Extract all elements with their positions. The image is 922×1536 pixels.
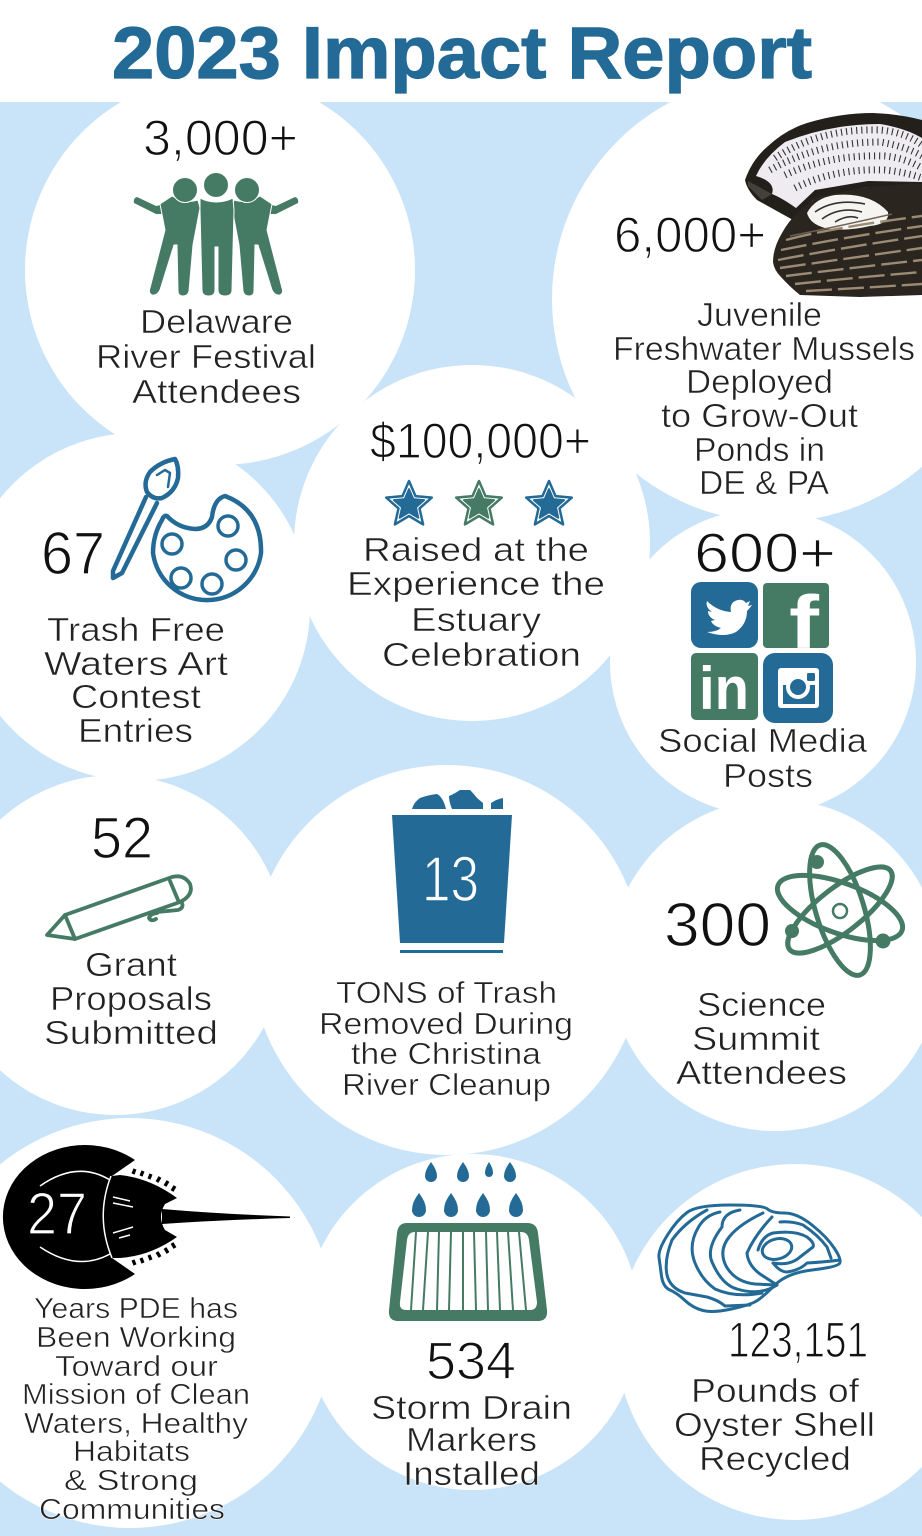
label: science summit attendees <box>676 986 847 1091</box>
label: pounds of oyster shell recycled: Oyster Shell <box>674 1406 875 1443</box>
number: 3,000+: 3,000+ <box>143 110 298 166</box>
icon: linkedin: in <box>699 655 749 722</box>
label: years PDE mission: Communities <box>39 1494 225 1526</box>
icon: oyster shell <box>659 1205 840 1311</box>
number: 300: 300 <box>664 891 771 960</box>
label: tons of trash removed: Removed During <box>319 1006 573 1041</box>
label: Delaware River Festival Attendees: River Festival <box>96 338 316 375</box>
label: grant proposals submitted <box>44 946 218 1051</box>
label: years PDE mission: Been Working <box>36 1322 236 1354</box>
label: pounds of oyster shell recycled: Recycled <box>699 1440 851 1477</box>
panel: social media <box>658 521 868 794</box>
label: Delaware River Festival Attendees: Delaware <box>140 303 293 340</box>
label: storm drain markers installed: Storm Drain <box>371 1389 572 1426</box>
label: social media posts <box>658 722 868 794</box>
label: juvenile mussels deployed: Freshwater Mussels <box>613 330 915 367</box>
label: trash free waters art contest entries: Entries <box>78 712 193 749</box>
panel: oyster shell <box>659 1205 875 1477</box>
label: years PDE mission: Habitats <box>73 1436 190 1468</box>
label: science summit attendees: Summit <box>692 1020 820 1057</box>
label: grant proposals submitted: Grant <box>85 946 177 983</box>
number: 67: 67 <box>41 520 105 587</box>
label: juvenile mussels deployed: Deployed <box>686 363 833 400</box>
label: years PDE mission: Years PDE has <box>34 1293 238 1325</box>
label: storm drain markers installed <box>371 1389 572 1492</box>
icon: brush and palette <box>113 459 261 600</box>
label: years PDE mission <box>22 1293 250 1526</box>
label: juvenile mussels deployed: Ponds in <box>694 431 825 468</box>
label: grant proposals submitted: Proposals <box>50 980 212 1017</box>
label: science summit attendees: Attendees <box>676 1054 847 1091</box>
label: storm drain markers installed: Markers <box>406 1421 537 1458</box>
label: years PDE mission: Waters, Healthy <box>24 1408 249 1440</box>
icon: mussel illustration <box>745 113 922 297</box>
label: raised at the celebration: Estuary <box>411 601 542 638</box>
panel: storm drain markers <box>371 1162 572 1492</box>
title: 2023 Impact Report <box>112 13 812 94</box>
label: tons of trash removed: TONS of Trash <box>336 975 557 1010</box>
label: trash free waters art contest entries: Trash Free <box>47 611 225 648</box>
icon: storm drain grate <box>389 1223 547 1321</box>
label: juvenile mussels deployed: to Grow-Out <box>661 397 858 434</box>
label: juvenile mussels deployed: DE & PA <box>699 464 829 501</box>
icon: horseshoe crab <box>3 1145 290 1289</box>
icon: twitter <box>691 582 758 648</box>
label: grant proposals submitted: Submitted <box>44 1014 218 1051</box>
panel: years working <box>3 1145 290 1526</box>
label: years PDE mission: Toward our <box>55 1351 218 1383</box>
label: tons of trash removed <box>319 975 573 1102</box>
label: social media posts: Posts <box>723 757 813 794</box>
number: 13: 13 <box>422 843 479 915</box>
icon: facebook: f <box>789 580 820 664</box>
label: pounds of oyster shell recycled <box>674 1372 875 1477</box>
label: raised at the celebration <box>347 531 605 673</box>
panel: science summit <box>664 838 911 1091</box>
label: science summit attendees: Science <box>697 986 826 1023</box>
panel: trash removed <box>319 790 573 1102</box>
label: raised at the celebration: Raised at the <box>363 531 589 568</box>
label: social media posts: Social Media <box>658 722 868 759</box>
label: trash free waters art contest entries <box>44 611 228 749</box>
panel: grant proposals <box>44 806 218 1051</box>
number: 123,151: 123,151 <box>728 1312 868 1368</box>
label: years PDE mission: & Strong <box>64 1465 198 1497</box>
label: raised at the celebration: Celebration <box>382 636 581 673</box>
number: 27: 27 <box>27 1181 87 1247</box>
label: tons of trash removed: the Christina <box>351 1036 542 1071</box>
label: juvenile mussels deployed: Juvenile <box>697 296 822 333</box>
panel: art contest <box>41 459 261 749</box>
label: raised at the celebration: Experience the <box>347 565 605 602</box>
icon: water drops <box>412 1162 523 1217</box>
number: 6,000+: 6,000+ <box>614 207 766 263</box>
panel: festival attendees <box>96 110 316 410</box>
label: tons of trash removed: River Cleanup <box>342 1067 551 1102</box>
label: trash free waters art contest entries: Contest <box>71 678 201 715</box>
number: 534: 534 <box>426 1332 516 1391</box>
label: years PDE mission: Mission of Clean <box>22 1379 250 1411</box>
label: Delaware River Festival Attendees <box>96 303 316 410</box>
number: 52: 52 <box>91 806 153 871</box>
label: Delaware River Festival Attendees: Attendees <box>132 373 301 410</box>
icon: three people <box>134 172 298 296</box>
panel: fundraising <box>347 413 605 673</box>
icon: pen <box>47 876 191 939</box>
number: 600+: 600+ <box>694 521 836 584</box>
icon: three stars <box>386 481 572 524</box>
panel: freshwater mussels <box>613 113 922 501</box>
label: trash free waters art contest entries: Waters Art <box>44 645 228 682</box>
label: pounds of oyster shell recycled: Pounds of <box>691 1372 860 1409</box>
label: juvenile mussels deployed <box>613 296 915 501</box>
icon: facebook <box>763 580 829 664</box>
label: storm drain markers installed: Installed <box>403 1455 540 1492</box>
icon: trash bucket <box>392 790 512 953</box>
number: $100,000+: $100,000+ <box>370 413 591 469</box>
icon: atom <box>769 838 911 982</box>
icon: instagram <box>763 653 833 723</box>
